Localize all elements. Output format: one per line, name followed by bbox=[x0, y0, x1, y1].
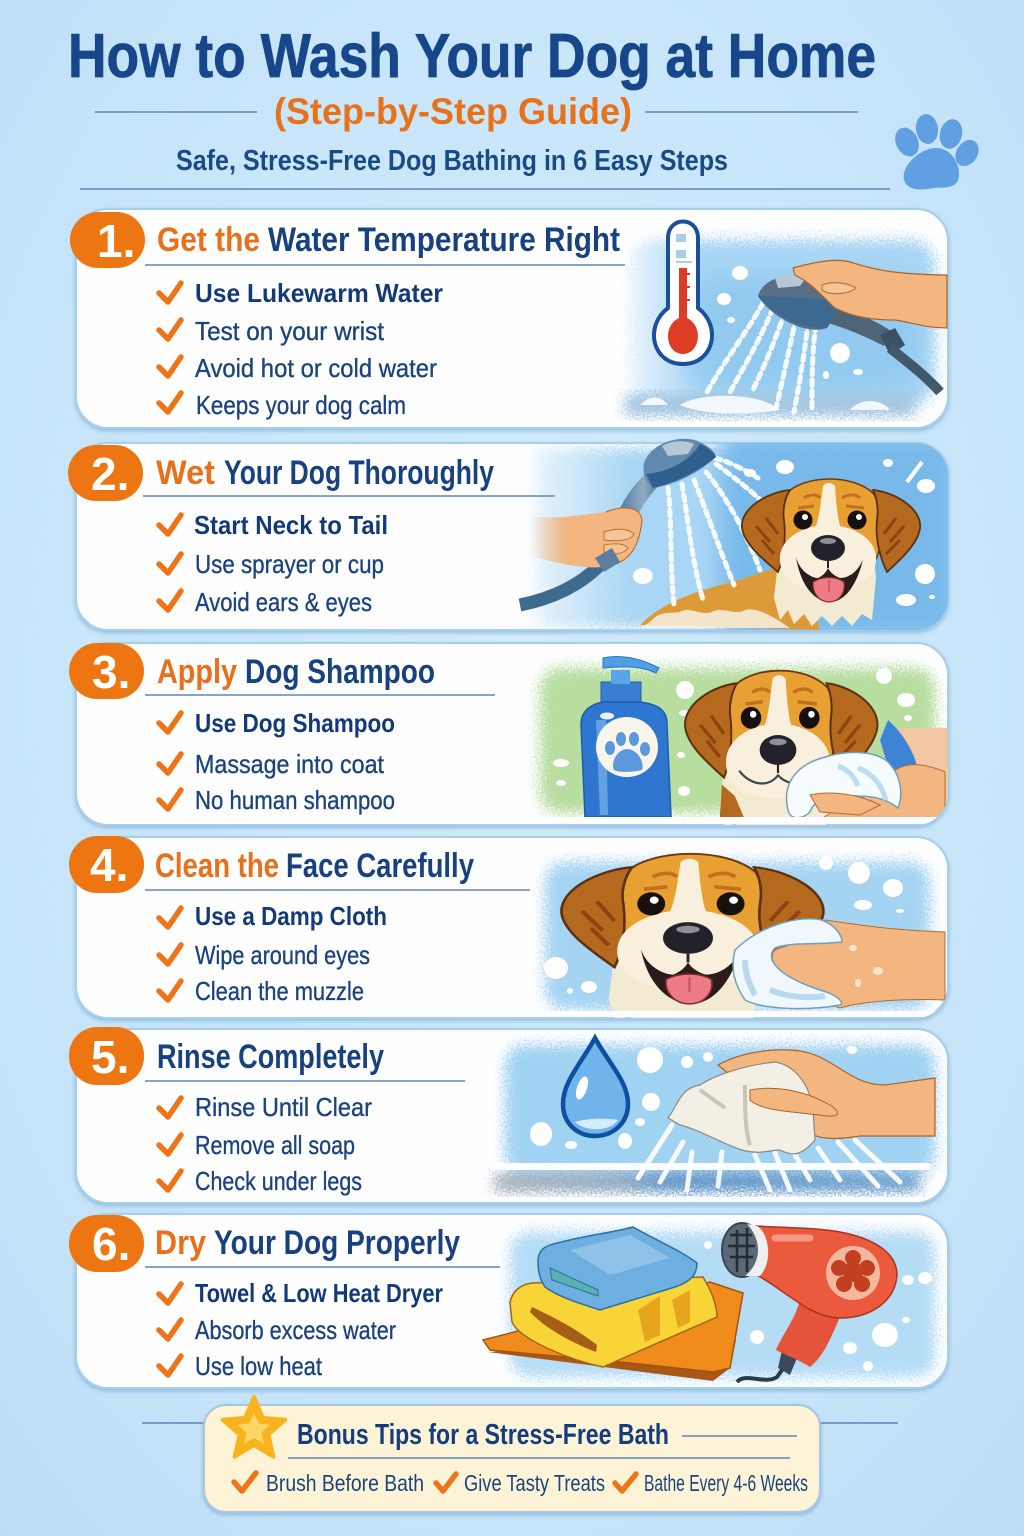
badge: step 6 bbox=[69, 1215, 144, 1272]
heading: step 2: Wet bbox=[156, 454, 215, 492]
subtitle: (Step-by-Step Guide) bbox=[274, 91, 632, 132]
checklist: step 4: Wipe around eyes bbox=[195, 940, 370, 970]
heading: step 6: Your Dog Properly bbox=[214, 1224, 460, 1262]
heading: step 3: Dog Shampoo bbox=[245, 653, 435, 691]
heading: step 6: Dry bbox=[155, 1224, 206, 1262]
badge: step 4: 4. bbox=[90, 839, 128, 891]
checklist: step 4 bbox=[159, 901, 387, 1006]
illustration: rinsing bbox=[490, 1038, 935, 1192]
checklist: step 6: Absorb excess water bbox=[195, 1315, 396, 1345]
illustration: towels and dryer bbox=[483, 1223, 935, 1382]
badge: step 2: 2. bbox=[91, 448, 129, 500]
checklist: bonus tips: Give Tasty Treats bbox=[464, 1470, 605, 1496]
checklist: bonus tips: Brush Before Bath bbox=[266, 1470, 424, 1496]
checklist: step 6: Towel & Low Heat Dryer bbox=[195, 1278, 443, 1308]
dog body bbox=[640, 569, 820, 630]
checklist: step 3: Massage into coat bbox=[195, 749, 385, 779]
checklist: step 1: Test on your wrist bbox=[195, 316, 385, 346]
checklist: step 2: Use sprayer or cup bbox=[195, 549, 384, 579]
icon: hand and shower bbox=[530, 439, 716, 572]
badge: step 4 bbox=[69, 836, 144, 893]
heading: step 4: Clean the bbox=[155, 847, 279, 885]
badge: step 3: 3. bbox=[92, 646, 130, 698]
illustration: cleaning dog face bbox=[530, 854, 950, 1033]
panel: step 1 bbox=[76, 209, 948, 428]
checklist: step 2: Start Neck to Tail bbox=[194, 510, 388, 540]
icon: thermometer bbox=[654, 222, 712, 364]
tagline: Safe, Stress-Free Dog Bathing in 6 Easy Steps bbox=[176, 145, 728, 177]
checklist: step 1: Use Lukewarm Water bbox=[195, 278, 443, 308]
heading: step 3: Apply bbox=[157, 653, 237, 691]
checklist: step 4: Clean the muzzle bbox=[195, 976, 364, 1006]
checklist: step 5: Remove all soap bbox=[195, 1130, 355, 1160]
checklist: step 4: Use a Damp Cloth bbox=[195, 901, 387, 931]
badge: step 5 bbox=[69, 1027, 144, 1085]
checklist: step 5: Rinse Until Clear bbox=[195, 1092, 372, 1122]
badge: step 6: 6. bbox=[92, 1218, 130, 1270]
illustration: shampoo and dog bbox=[530, 656, 950, 840]
heading: step 6 bbox=[155, 1224, 460, 1262]
panel: step 3 bbox=[76, 643, 950, 840]
badge: step 1: 1. bbox=[97, 215, 135, 267]
checklist: step 6: Use low heat bbox=[195, 1351, 323, 1381]
icon: stacked towels bbox=[483, 1227, 743, 1381]
heading: step 2 bbox=[156, 454, 494, 492]
icon: star bbox=[223, 1397, 285, 1457]
icon: water drop bbox=[563, 1038, 628, 1136]
checklist: step 2 bbox=[159, 510, 388, 617]
icon: hand and shower head bbox=[758, 260, 947, 392]
icon: hand with towel bbox=[786, 752, 945, 820]
badge: step 2 bbox=[68, 445, 143, 501]
badge: step 1 bbox=[70, 212, 145, 268]
heading: step 4: Face Carefully bbox=[286, 847, 474, 885]
icon: dog bbox=[561, 854, 823, 1033]
icon: paw print bbox=[891, 113, 983, 190]
checklist: step 1: Keeps your dog calm bbox=[196, 390, 406, 420]
heading: step 3 bbox=[157, 653, 435, 691]
heading: step 2: Your Dog Thoroughly bbox=[224, 454, 494, 492]
checklist: bonus tips bbox=[234, 1470, 808, 1496]
checklist: step 1: Avoid hot or cold water bbox=[195, 353, 437, 383]
checklist: step 1 bbox=[159, 278, 443, 420]
heading: step 1 bbox=[157, 221, 620, 259]
panel: step 5 bbox=[76, 1029, 948, 1203]
panel: step 6 bbox=[76, 1214, 948, 1388]
heading: step 1: Water Temperature Right bbox=[268, 221, 620, 259]
checklist: bonus tips: Bathe Every 4-6 Weeks bbox=[644, 1470, 808, 1496]
heading: bonus tips: Bonus Tips for a Stress-Free Bath bbox=[297, 1419, 669, 1451]
panel: bonus tips bbox=[204, 1397, 820, 1512]
checklist: step 6 bbox=[159, 1278, 443, 1381]
heading: step 4 bbox=[155, 847, 474, 885]
title: How to Wash Your Dog at Home bbox=[68, 22, 876, 91]
icon: hand with cloth bbox=[668, 1050, 935, 1154]
icon: shampoo bottle bbox=[581, 656, 671, 817]
heading: step 5: Rinse Completely bbox=[157, 1038, 384, 1076]
checklist: step 3: Use Dog Shampoo bbox=[195, 708, 395, 738]
icon: dog bbox=[685, 671, 877, 840]
checklist: step 3: No human shampoo bbox=[195, 785, 395, 815]
illustration: shower and thermometer bbox=[625, 222, 947, 416]
icon: hand with towel bbox=[733, 919, 945, 1009]
checklist: step 3 bbox=[159, 708, 395, 815]
checklist: step 5 bbox=[159, 1092, 372, 1196]
panel: step 4 bbox=[76, 837, 950, 1033]
illustration: wetting dog bbox=[518, 443, 948, 630]
icon: bottle paw bbox=[605, 732, 650, 772]
heading: step 1: Get the bbox=[157, 221, 260, 259]
badge: step 3 bbox=[69, 643, 144, 699]
checklist: step 2: Avoid ears & eyes bbox=[195, 587, 372, 617]
badge: step 5: 5. bbox=[91, 1031, 129, 1083]
checklist: step 5: Check under legs bbox=[195, 1166, 362, 1196]
icon: dog bbox=[742, 479, 920, 626]
icon: hair dryer bbox=[722, 1223, 897, 1382]
panel: step 2 bbox=[76, 430, 965, 640]
